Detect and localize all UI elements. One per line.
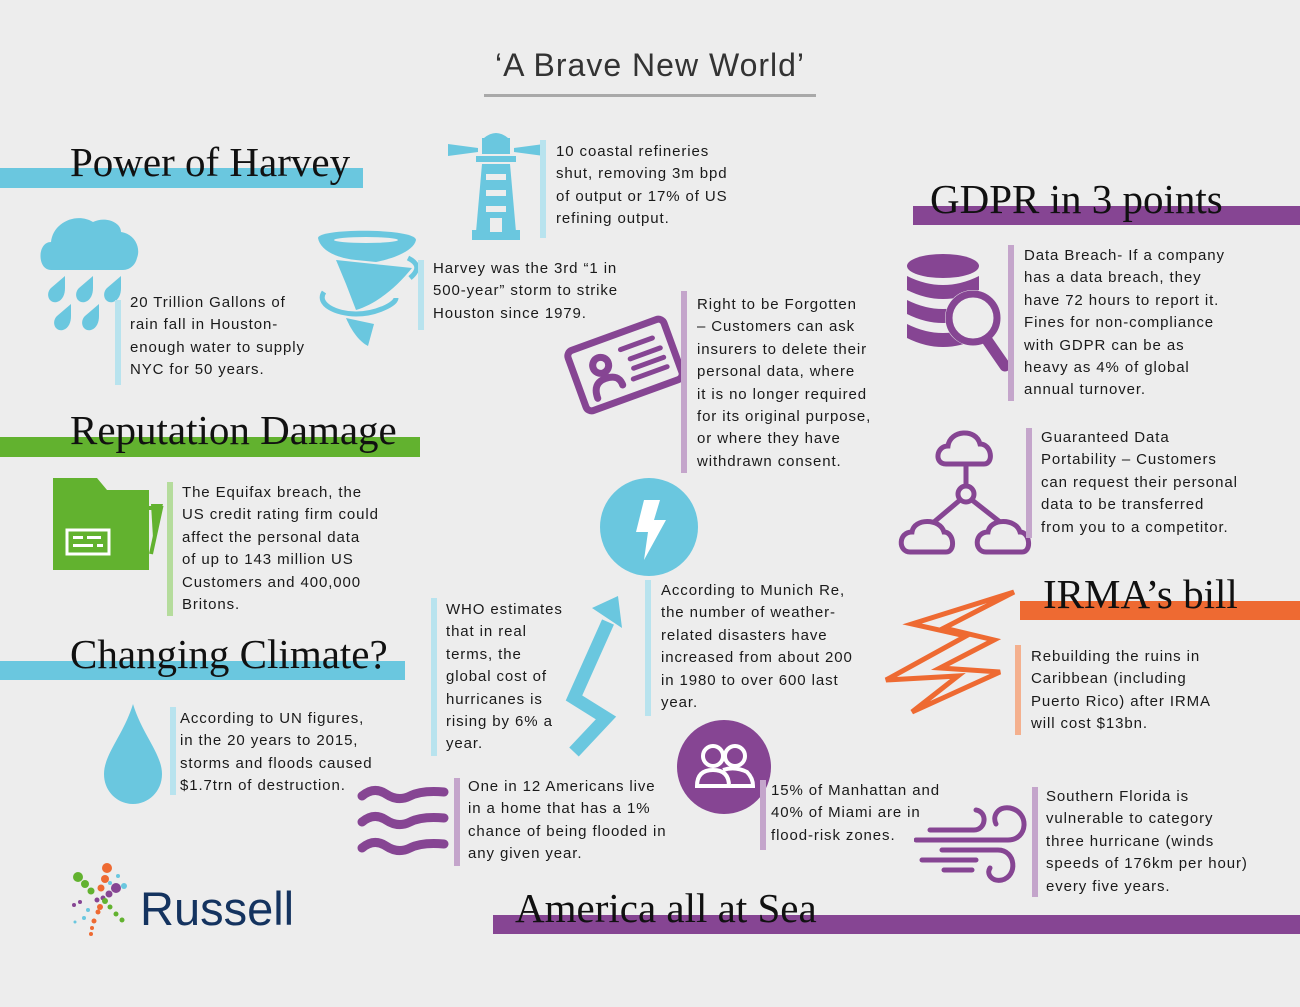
- text: Equifax: The Equifax breach, the: [182, 484, 362, 501]
- text: right to be forgotten: Right to be Forgotten: [697, 296, 857, 313]
- text: data portability: from you to a competitor.: [1041, 519, 1229, 536]
- icon: cloud network: [898, 430, 1032, 554]
- text: Southern Florida: three hurricane (winds: [1046, 833, 1214, 850]
- heading bar: Reputation Damage: [0, 437, 420, 457]
- text: UN figures: $1.7trn of destruction.: [180, 777, 346, 794]
- text: tornado: 500-year” storm to strike: [433, 282, 618, 299]
- heading bar: Power of Harvey: [0, 168, 363, 188]
- heading bar: Changing Climate: [0, 661, 405, 680]
- text: Southern Florida: every five years.: [1046, 878, 1171, 895]
- icon: water drop: [104, 704, 162, 804]
- text: rain: 20 Trillion Gallons of: [130, 294, 286, 311]
- title: [484, 44, 816, 97]
- text: Munich Re: year.: [661, 694, 698, 711]
- text: Equifax: of up to 143 million US: [182, 551, 354, 568]
- text: Manhattan: 40% of Miami are in: [771, 804, 921, 821]
- text: UN figures: [170, 707, 373, 795]
- text: data portability: Guaranteed Data: [1041, 429, 1170, 446]
- text: tornado: Harvey was the 3rd “1 in: [433, 260, 617, 277]
- title: ‘A Brave New World’: [495, 47, 805, 83]
- text: Equifax: Britons.: [182, 596, 240, 613]
- text: Equifax: [167, 482, 379, 616]
- text: IRMA: Rebuilding the ruins in: [1031, 648, 1200, 665]
- icon: people circle: [677, 720, 771, 814]
- text: lighthouse: refining output.: [556, 210, 670, 227]
- text: UN figures: storms and floods caused: [180, 755, 373, 772]
- text: data portability: [1026, 428, 1238, 538]
- heading: Changing Climate?: Changing Climate?: [70, 631, 388, 677]
- text: WHO estimates: rising by 6% a: [446, 713, 553, 730]
- heading: Power of Harvey: Power of Harvey: [70, 139, 350, 185]
- text: Equifax: Customers and 400,000: [182, 574, 361, 591]
- text: One in 12 Americans: in a home that has a 1%: [468, 800, 650, 817]
- icon: rising arrow: [566, 596, 622, 756]
- text: rain: rain fall in Houston-: [130, 316, 278, 333]
- text: right to be forgotten: for its original purpose,: [697, 408, 871, 425]
- text: Munich Re: the number of weather-: [661, 604, 836, 621]
- text: Munich Re: related disasters have: [661, 627, 828, 644]
- text: data breach: Fines for non-compliance: [1024, 314, 1214, 331]
- text: data breach: [1008, 245, 1225, 401]
- text: Equifax: US credit rating firm could: [182, 506, 379, 523]
- icon: waves: [358, 786, 448, 856]
- text: WHO estimates: WHO estimates: [446, 601, 563, 618]
- text: right to be forgotten: – Customers can ask: [697, 318, 855, 335]
- text: IRMA: Puerto Rico) after IRMA: [1031, 693, 1211, 710]
- icon: database search: [907, 254, 1008, 372]
- text: Munich Re: increased from about 200: [661, 649, 853, 666]
- text: data portability: can request their personal: [1041, 474, 1238, 491]
- text: IRMA: will cost $13bn.: [1031, 715, 1148, 732]
- heading bar: GDPR: [913, 206, 1300, 225]
- text: Equifax: affect the personal data: [182, 529, 360, 546]
- text: WHO estimates: global cost of: [446, 668, 547, 685]
- icon: wind: [914, 805, 1027, 883]
- icon: lightning circle: [600, 478, 698, 576]
- text: right to be forgotten: withdrawn consent.: [697, 453, 842, 470]
- logo: Russell: Russell: [140, 882, 294, 935]
- text: right to be forgotten: personal data, where: [697, 363, 855, 380]
- text: Southern Florida: speeds of 176km per hour): [1046, 855, 1248, 872]
- text: Manhattan: flood-risk zones.: [771, 827, 896, 844]
- icon: folder: [53, 478, 164, 570]
- heading: GDPR in 3 points: GDPR in 3 points: [930, 176, 1223, 222]
- text: right to be forgotten: [681, 291, 871, 473]
- text: Munich Re: in 1980 to over 600 last: [661, 672, 839, 689]
- text: IRMA: [1015, 645, 1211, 735]
- heading: Reputation Damage: Reputation Damage: [70, 407, 397, 453]
- text: data breach: Data Breach- If a company: [1024, 247, 1225, 264]
- heading bar: America all at Sea: [493, 915, 1300, 934]
- icon: ID card: [564, 316, 681, 414]
- text: One in 12 Americans: any given year.: [468, 845, 582, 862]
- logo: Russell: [72, 863, 294, 936]
- text: tornado: [418, 260, 618, 330]
- text: Manhattan: [760, 780, 940, 850]
- text: data portability: data to be transferred: [1041, 496, 1204, 513]
- text: Manhattan: 15% of Manhattan and: [771, 782, 940, 799]
- icon: rain cloud: [40, 218, 138, 330]
- text: data breach: has a data breach, they: [1024, 269, 1201, 286]
- text: data breach: have 72 hours to report it.: [1024, 292, 1219, 309]
- text: lighthouse: 10 coastal refineries: [556, 143, 709, 160]
- text: One in 12 Americans: [454, 778, 667, 866]
- text: WHO estimates: that in real: [446, 623, 527, 640]
- text: Southern Florida: Southern Florida is: [1046, 788, 1189, 805]
- text: right to be forgotten: insurers to delete their: [697, 341, 867, 358]
- heading bar: IRMA's bill: [1020, 601, 1300, 620]
- text: WHO estimates: hurricanes is: [446, 691, 543, 708]
- text: Munich Re: According to Munich Re,: [661, 582, 845, 599]
- text: One in 12 Americans: One in 12 Americans live: [468, 778, 656, 795]
- text: UN figures: According to UN figures,: [180, 710, 364, 727]
- text: rain: enough water to supply: [130, 339, 305, 356]
- text: WHO estimates: [431, 598, 563, 756]
- heading: America all at Sea: America all at Sea: [515, 885, 817, 931]
- text: lighthouse: shut, removing 3m bpd: [556, 165, 727, 182]
- icon: tornado: [318, 230, 418, 346]
- icon: lighthouse: [448, 133, 540, 240]
- text: data breach: annual turnover.: [1024, 381, 1146, 398]
- text: IRMA: Caribbean (including: [1031, 670, 1187, 687]
- text: tornado: Houston since 1979.: [433, 305, 587, 322]
- text: data breach: with GDPR can be as: [1024, 337, 1184, 354]
- icon: orange lightning zigzag: [884, 590, 1016, 714]
- heading: IRMA's bill: IRMA’s bill: [1043, 571, 1238, 617]
- text: data portability: Portability – Customers: [1041, 451, 1217, 468]
- text: UN figures: in the 20 years to 2015,: [180, 732, 358, 749]
- text: lighthouse: [540, 140, 728, 238]
- text: right to be forgotten: it is no longer required: [697, 386, 867, 403]
- text: WHO estimates: year.: [446, 735, 483, 752]
- text: Southern Florida: vulnerable to category: [1046, 810, 1213, 827]
- text: WHO estimates: terms, the: [446, 646, 522, 663]
- text: rain: [115, 294, 305, 385]
- text: Munich Re: [645, 580, 853, 716]
- text: right to be forgotten: or where they have: [697, 430, 841, 447]
- text: lighthouse: of output or 17% of US: [556, 188, 728, 205]
- text: Southern Florida: [1032, 787, 1248, 897]
- text: rain: NYC for 50 years.: [130, 361, 265, 378]
- text: One in 12 Americans: chance of being flooded in: [468, 823, 667, 840]
- text: data breach: heavy as 4% of global: [1024, 359, 1190, 376]
